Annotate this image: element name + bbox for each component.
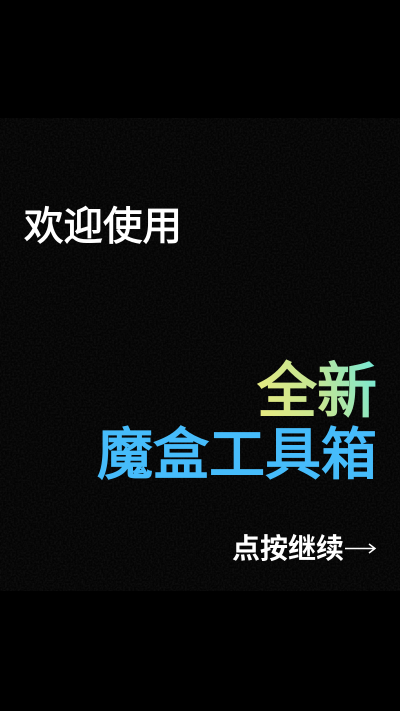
heading: welcome text: 欢迎使用 <box>24 205 182 249</box>
call to action: tap to continue: 点按继续 <box>232 533 344 564</box>
title: new: 全新 <box>257 358 377 425</box>
icon: right arrow <box>345 543 376 554</box>
panel: noise textured background <box>0 118 400 591</box>
title: magic box toolbox: 魔盒工具箱 <box>97 423 377 486</box>
